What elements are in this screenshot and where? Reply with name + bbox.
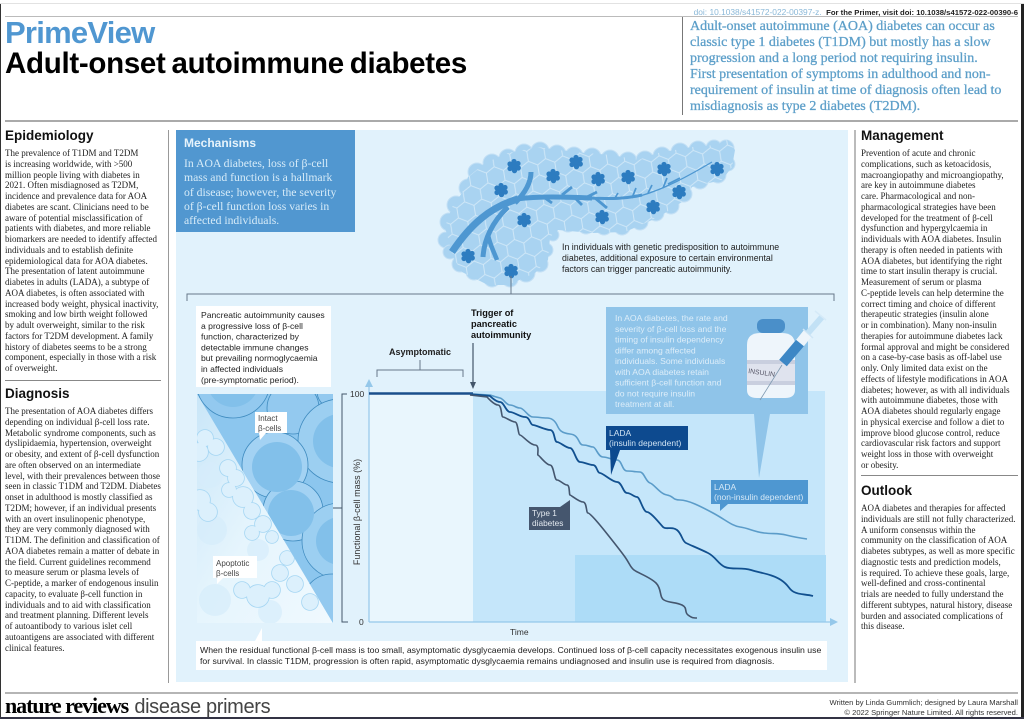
text: management: improve blood glucose control, reduce	[861, 428, 1000, 438]
text: outlook	[861, 503, 1015, 631]
text: diagnosis: capacity, to evaluate β-cell function in	[5, 589, 142, 599]
text: diagnosis: to measure serum or plasma levels of	[5, 567, 139, 577]
icon: insulin bottle	[747, 319, 795, 398]
text: mechanisms intro: mass and function is a hallmark	[184, 171, 332, 184]
text: management: dysfunction and hypergylcaemia in	[861, 223, 988, 233]
illustration: intact cells	[197, 394, 333, 623]
curve: LADA insulin dependent	[470, 394, 813, 596]
white text box: dysglycaemia	[196, 628, 827, 670]
text: diagnosis: the field. Current guidelines recommend	[5, 556, 151, 566]
label: intact cells	[255, 412, 287, 440]
text: diagnosis: individuals and to aid with classification	[5, 600, 151, 610]
curve: type 1 diabetes	[470, 395, 697, 618]
text: management: or obesity.	[861, 460, 898, 470]
heading: outlook: Outlook	[861, 483, 912, 498]
text: diagnosis: are often observed on an intermediate	[5, 460, 141, 470]
label: LADA insulin dependent	[606, 426, 688, 475]
text: epidemiology: The presentation of latent autoimmune	[5, 266, 144, 276]
callout: insulin dependency: with AOA diabetes retain	[614, 367, 709, 377]
text: epidemiology: of overweight.	[5, 363, 57, 373]
heading: diagnosis: Diagnosis	[5, 386, 70, 401]
text: mechanisms intro: of disease; however, the severity	[184, 186, 336, 199]
text: diagnosis: level, with their prevalences between those	[5, 470, 160, 480]
text: epidemiology: history of diabetes seems to be a strong	[5, 342, 147, 352]
text: management: Measurement of serum or plasma	[861, 277, 981, 287]
intro text: classic type 1 diabetes (T1DM) but mostly has a slow	[690, 35, 991, 50]
text: diagnosis: or obesity, and extent of β-cell dysfunction	[5, 449, 159, 459]
text: management: AOA diabetes, but identifying the right	[861, 256, 1002, 266]
text: management: Prevention of acute and chronic	[861, 148, 975, 158]
y scale	[333, 394, 348, 622]
text: outlook: diagnostic tests and prediction models,	[861, 557, 1001, 567]
white text box: pancreatic autoimmunity: (pre-symptomatic period).	[201, 375, 299, 385]
label: type 1 diabetes: diabetes	[532, 518, 563, 528]
plateau line	[369, 392, 473, 395]
chart: functional beta-cell mass over time	[333, 379, 838, 637]
footer logo: nature reviews disease primers: nature reviews disease primers	[5, 693, 270, 718]
label: asymptomatic bracket	[377, 347, 463, 377]
text: diagnosis	[5, 406, 161, 652]
intro text: Adult-onset autoimmune (AOA) diabetes can occur as	[690, 19, 995, 34]
panel: outlook	[861, 483, 1015, 631]
callout: insulin dependency: individuals. Some individuals	[615, 356, 725, 366]
callout: insulin dependency: severity of β-cell loss and the	[615, 324, 727, 334]
label: type 1 diabetes	[529, 500, 570, 530]
illustration: pancreas	[438, 135, 740, 294]
text: epidemiology: increased body weight, physical inactivity,	[5, 298, 158, 308]
label: trigger of pancreatic autoimmunity: Trigger of	[471, 308, 514, 318]
white text box: dysglycaemia: for survival. In classic T1DM, progression is often rapid, asymptomatic dysglycaemia remains undiagnosed and insulin use is required from diagnosis.	[200, 656, 774, 666]
text: epidemiology: AOA diabetes, is often associated with	[5, 288, 144, 298]
icon: syringe	[760, 311, 826, 400]
text: diagnosis: Metabolic syndrome components, such as	[5, 428, 156, 438]
text: management: C-peptide levels can help determine the	[861, 288, 1004, 298]
text: epidemiology: The prevalence of T1DM and T2DM	[5, 148, 138, 158]
label: LADA non-insulin dependent: LADA	[714, 482, 737, 492]
text: epidemiology: by adult overweight, similar to the risk	[5, 320, 145, 330]
white text box: pancreatic autoimmunity: a progressive loss of β-cell	[201, 321, 303, 331]
text: management: macroangiopathy and microangiopathy,	[861, 170, 1004, 180]
main illustration	[186, 140, 838, 670]
label: type 1 diabetes: Type 1	[532, 508, 557, 518]
text: management: therapeutic strategies (insulin alone	[861, 309, 989, 319]
label: asymptomatic bracket: Asymptomatic	[389, 347, 451, 357]
callout: insulin dependency	[606, 307, 826, 478]
text: mechanisms intro: In AOA diabetes, loss of β-cell	[184, 157, 328, 170]
text: management: effects of lifestyle modifications in AOA	[861, 374, 1008, 384]
text: management: formal approval and might be considered	[861, 342, 1009, 352]
text: epidemiology: epidemiological data for AOA diabetes.	[5, 256, 148, 266]
text: management: individuals with AOA diabetes. Insulin	[861, 234, 1001, 244]
lobule outline	[438, 140, 735, 287]
mechanisms box	[176, 130, 355, 232]
white text box: pancreatic autoimmunity: function, characterized by	[201, 332, 300, 342]
callout: insulin dependency: sufficient β-cell function and	[615, 378, 722, 388]
axis labels: 100	[350, 389, 364, 399]
text: diagnosis: AOA diabetes remain a matter of debate in	[5, 546, 159, 556]
white text box: dysglycaemia: When the residual functional β-cell mass is too small, asymptomatic dysglycaemia develops. Continued loss of β-cell capacity necessitates exogenous insulin use	[200, 645, 821, 655]
text: outlook: is required. To achieve these goals, large,	[861, 568, 1009, 578]
text: epidemiology: smoking and low birth weight followed	[5, 309, 147, 319]
white text box: pancreatic autoimmunity: detectable immune changes	[201, 342, 308, 352]
callout: insulin dependency: treatment at all.	[615, 399, 674, 409]
panel: diagnosis	[5, 386, 161, 652]
text: management: therapies for autoimmune diabetes lack	[861, 331, 1002, 341]
text: epidemiology: 2021. Often misdiagnosed as T2DM,	[5, 180, 138, 190]
panel: mechanisms	[176, 130, 848, 682]
text: diagnosis: they are very commonly diagnosed with	[5, 524, 150, 534]
text: management: diabetes; however, as with all individuals	[861, 384, 1010, 394]
heading: epidemiology: Epidemiology	[5, 128, 94, 143]
callout: insulin dependency: timing of insulin dependency	[615, 334, 725, 344]
white text box: pancreatic autoimmunity: but prevailing normoglycaemia	[201, 353, 318, 363]
label: apoptotic cells: β-cells	[216, 569, 239, 578]
curve: LADA non-insulin dependent	[470, 394, 807, 539]
text: epidemiology: aware of potential misclassification of	[5, 212, 142, 222]
text: diagnosis: seen in classic T1DM and T2DM. Diabetes	[5, 481, 161, 491]
label: trigger of pancreatic autoimmunity: pancreatic	[471, 319, 517, 329]
text: mechanisms intro: affected individuals.	[184, 214, 279, 227]
text: epidemiology: factors for T2DM development. A family	[5, 331, 153, 341]
pancreatic islets	[461, 155, 724, 278]
footer credits: Written by Linda Gummlich; designed by Laura Marshall	[829, 698, 1018, 707]
text: mechanisms intro	[184, 157, 336, 227]
label: LADA non-insulin dependent: (non-insulin dependent)	[714, 492, 803, 502]
heading: management: Management	[861, 128, 944, 143]
text: genetic predisposition: In individuals with genetic predisposition to autoimmune	[562, 242, 779, 252]
panel: management	[861, 128, 1010, 470]
text: epidemiology: patients with diabetes, and more reliable	[5, 223, 150, 233]
text: diagnosis: and treatment planning. Different levels	[5, 610, 149, 620]
text: epidemiology: biomarkers are needed to identify affected	[5, 234, 157, 244]
axis labels: 0	[359, 617, 364, 627]
label: trigger of pancreatic autoimmunity: autoimmunity	[471, 330, 532, 340]
text: management: therapy is often needed in patients with	[861, 245, 1002, 255]
chart regions	[369, 391, 826, 622]
intro text: misdiagnosis as type 2 diabetes (T2DM).	[690, 99, 920, 114]
text: outlook: AOA diabetes and therapies for affected	[861, 503, 1006, 513]
panel: epidemiology	[5, 128, 158, 373]
text: diagnosis: The presentation of AOA diabetes differs	[5, 406, 153, 416]
label: LADA non-insulin dependent	[711, 480, 808, 511]
text: management: care. Pharmacological and non-	[861, 191, 975, 201]
white text box: pancreatic autoimmunity	[196, 306, 331, 387]
text: diagnosis: onset in adulthood is mostly classified as	[5, 492, 152, 502]
white text box: pancreatic autoimmunity: in affected individuals	[201, 364, 283, 374]
text: diagnosis: C-peptide, a marker of endogenous insulin	[5, 578, 158, 588]
text: management: correct timing and choice of different	[861, 298, 996, 308]
text: outlook: well-defined and cross-continental	[861, 578, 985, 588]
intro text	[690, 19, 1001, 114]
intro text: requirement of insulin at time of diagnosis often lead to	[690, 83, 1001, 98]
text: diagnosis: T1DM. The definition and classification of	[5, 535, 160, 545]
white text box: pancreatic autoimmunity: Pancreatic autoimmunity causes	[201, 310, 325, 320]
text: management: pharmacological strategies have been	[861, 202, 996, 212]
illustration: apoptotic cells	[190, 394, 333, 624]
text: management: developed for the treatment of β-cell	[861, 212, 993, 222]
text: diagnosis: depending on individual β-cell loss rate.	[5, 417, 150, 427]
label: intact cells: Intact	[258, 414, 278, 423]
text: diagnosis: with an overt insulinopenic phenotype,	[5, 514, 145, 524]
text: epidemiology: million people living with diabetes in	[5, 170, 140, 180]
text: outlook: trials are needed to fully understand the	[861, 589, 1003, 599]
label: LADA insulin dependent: (insulin dependent)	[609, 438, 681, 448]
text: management: time to start insulin therapy is crucial.	[861, 266, 997, 276]
text: epidemiology: individuals and to establish definite	[5, 245, 133, 255]
callout: insulin dependency: In AOA diabetes, the rate and	[615, 313, 728, 323]
footer credits	[829, 698, 1018, 716]
text: outlook: A uniform consensus within the	[861, 524, 976, 534]
footer credits: © 2022 Springer Nature Limited. All rights reserved.	[844, 708, 1018, 716]
icon: insulin bottle: INSULIN	[748, 368, 775, 379]
text: management: weight loss in those with overweight	[861, 449, 993, 459]
text: epidemiology	[5, 148, 158, 373]
text: diagnosis: clinical features.	[5, 642, 64, 652]
text: management: complications, such as ketoacidosis,	[861, 159, 991, 169]
text: management: only. Only limited data exist on the	[861, 363, 988, 373]
text: diagnosis: dyslipidaemia, hypertension, overweight	[5, 438, 151, 448]
text: management: are key in autoimmune diabetes	[861, 180, 975, 190]
text: mechanisms intro: of β-cell function loss varies in	[184, 200, 329, 213]
title: Adult-onset autoimmune diabetes: Adult-onset autoimmune diabetes	[5, 47, 467, 80]
label: intact cells: β-cells	[258, 424, 281, 433]
axis labels: Time	[510, 627, 529, 637]
x and y axes	[365, 379, 838, 626]
text: diagnosis: T2DM; however, if an individual presents	[5, 503, 156, 513]
text: management: in physical exercise and follow a diet to	[861, 417, 1004, 427]
text: management: cardiovascular risk factors and support	[861, 438, 1000, 448]
title: PrimeView: PrimeView	[5, 15, 154, 50]
axis labels	[350, 389, 529, 637]
text: outlook: diabetes subtypes, as well as more specific	[861, 546, 1015, 556]
pancreatic duct	[452, 162, 712, 260]
text: outlook: burden and associated complications of	[861, 610, 1003, 620]
text: management: on a case-by-case basis as off-label use	[861, 352, 1002, 362]
callout: insulin dependency: do not require insulin	[615, 388, 695, 398]
axis labels: Functional β-cell mass (%)	[352, 459, 362, 565]
text: management: with autoimmune diabetes, those with	[861, 395, 998, 405]
text: management: or in combination). Many non-insulin	[861, 320, 997, 330]
text: epidemiology: diabetes in adults (LADA), a subtype of	[5, 277, 149, 287]
text: genetic predisposition: factors can trigger pancreatic autoimmunity.	[562, 264, 732, 274]
intro text: progression and a long period not requiring insulin.	[690, 51, 978, 66]
text: genetic predisposition: diabetes, additional exposure to certain environmental	[562, 253, 773, 263]
text: diagnosis: of autoantibody to various islet cell	[5, 621, 132, 631]
bracket from pancreas to chart	[187, 294, 834, 301]
text: diagnosis: autoantigens are associated with different	[5, 632, 154, 642]
heading: mechanisms: Mechanisms	[184, 136, 256, 150]
text: epidemiology: diabetes are scant. Clinicians need to be	[5, 202, 149, 212]
text: outlook: this disease.	[861, 621, 904, 631]
label: trigger of pancreatic autoimmunity	[470, 308, 532, 389]
intro text: First presentation of symptoms in adulthood and non-	[690, 67, 991, 82]
text: epidemiology: is increasing worldwide, with >500	[5, 159, 132, 169]
callout: insulin dependency: differ among affected	[615, 346, 696, 356]
text: management	[861, 148, 1010, 470]
text: epidemiology: incidence and prevalence data for AOA	[5, 191, 147, 201]
label: apoptotic cells: Apoptotic	[216, 559, 249, 568]
text: epidemiology: component, especially in those with a risk	[5, 352, 156, 362]
doi line: doi: 10.1038/s41572-022-00397-z. For the Primer, visit doi: 10.1038/s41572-022-00390-6	[694, 7, 1018, 17]
text: management: AOA diabetes should regularly engage	[861, 406, 1000, 416]
text: outlook: different subtypes, natural history, disease	[861, 600, 1012, 610]
label: apoptotic cells	[213, 556, 257, 584]
text: outlook: community on the classification of AOA	[861, 535, 1007, 545]
text: outlook: individuals are still not fully characterized.	[861, 514, 1015, 524]
label: LADA insulin dependent: LADA	[609, 428, 632, 438]
